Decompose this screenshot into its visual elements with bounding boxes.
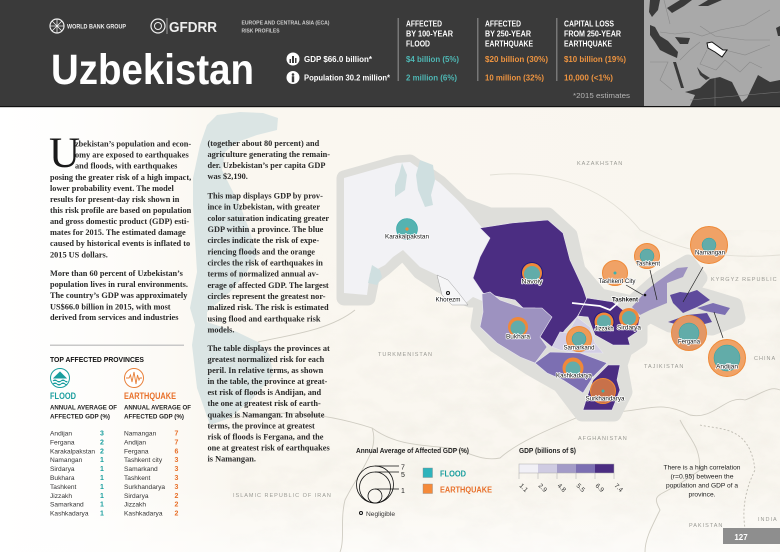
neighbouring country labels: ISLAMIC REPUBLIC OF IRAN: [233, 493, 332, 499]
stat column: flood: 2 million (6%): [406, 74, 457, 82]
neighbouring country labels: INDIA: [758, 517, 778, 523]
text block: introduction column: omy are exposed to earthquakes: [75, 150, 189, 160]
text block: introduction column: US$66.0 billion in 2015, with most: [50, 302, 171, 312]
text block: second column: in the table, the province at great-: [208, 377, 327, 386]
Kashkadarya region: [535, 352, 607, 393]
legend: affected GDP circles: 1: [401, 488, 405, 495]
stat column: earthquake affected: [477, 18, 548, 82]
legend: affected GDP circles: [356, 448, 469, 518]
province labels: Bukhara: [506, 334, 530, 340]
text block: second column: [208, 139, 330, 464]
text block: introduction column: lower probability event. The model: [50, 184, 174, 193]
text block: second column: using flood and earthquake risk: [208, 314, 321, 323]
text block: introduction column: derived from services and industries: [50, 313, 179, 322]
text block: second column: circles the risk of earthquakes in: [208, 258, 323, 268]
text block: second column: color saturation indicating greater: [208, 214, 329, 223]
province labels: Navoiy: [522, 278, 543, 286]
province labels: Khorezm: [436, 296, 460, 304]
stat column: flood: $4 billion (5%): [406, 55, 459, 64]
earthquake list: 3: [175, 484, 179, 491]
header band: [0, 0, 780, 107]
series label: EUROPE AND CENTRAL ASIA (ECA): [242, 20, 330, 26]
icon: earthquake: [124, 368, 144, 388]
flood list: 1: [100, 502, 104, 509]
province labels: Samarkand: [564, 344, 595, 352]
province labels: Surkhandarya: [586, 396, 625, 402]
icon: flood: [50, 368, 70, 388]
text block: second column: der. Uzbekistan’s per capita GDP: [208, 161, 325, 170]
flood list: FLOOD: [50, 391, 76, 401]
text block: second column: erage of affected GDP. The largest: [208, 281, 329, 290]
text block: introduction column: and gross domestic product (GDP) esti-: [50, 217, 189, 226]
text block: second column: models.: [208, 326, 234, 334]
panel: province map: [344, 160, 746, 414]
province labels: Karakalpakstan: [385, 234, 429, 240]
correlation note: population and GDP of a: [666, 482, 738, 490]
stat column: capital loss: $10 billion (19%): [564, 55, 626, 64]
earthquake list: 2: [175, 502, 179, 509]
flood list: Sirdarya: [50, 466, 75, 473]
earthquake list: 7: [175, 430, 179, 438]
text block: second column: terms, the province at greatest: [208, 421, 315, 430]
text block: second column: quakes is Namangan. In absolute: [208, 410, 325, 419]
text block: introduction column: zbekistan’s population and econ-: [75, 140, 191, 148]
flood list: AFFECTED GDP (%): [50, 414, 110, 420]
correlation note: province.: [688, 492, 716, 498]
earthquake list: 3: [175, 466, 179, 473]
text block: second column: was $2,190.: [208, 172, 248, 181]
text block: introduction column: caused by historical events is inflated to: [50, 239, 190, 248]
flood list: Jizzakh: [50, 493, 72, 500]
flood list: Kashkadarya: [50, 511, 89, 518]
page number: 127: [734, 533, 748, 542]
text block: introduction column: U: [49, 130, 80, 177]
map background: [145, 107, 780, 552]
flood list: 1: [100, 457, 104, 464]
flood list: 2: [100, 448, 104, 455]
legend: GDP scale: 5.5: [575, 482, 586, 494]
series label: RISK PROFILES: [242, 28, 280, 34]
province labels: Sirdarya: [617, 324, 641, 332]
earthquake list: ANNUAL AVERAGE OF: [124, 404, 191, 412]
legend: affected GDP circles: 5: [401, 472, 405, 479]
text block: second column: circles represent the greatest nor-: [208, 292, 326, 301]
Andijan region: [697, 303, 730, 315]
legend: GDP scale: 1.1: [518, 482, 529, 494]
text block: introduction column: population lives in rural environments.: [50, 280, 188, 289]
text block: introduction column: and floods, with earthquakes: [75, 162, 178, 170]
flood list: Bukhara: [50, 475, 75, 482]
text block: introduction column: posing the greater risk of a high impact,: [50, 173, 191, 182]
legend: affected GDP circles: Negligible: [366, 511, 395, 518]
Tashkent region: [632, 267, 688, 315]
text block: introduction column: results for present-day risk shown in: [50, 195, 180, 204]
logo: World Bank Group: WORLD BANK GROUP: [67, 24, 127, 30]
text block: introduction column: mates for 2015. The estimated damage: [50, 228, 186, 237]
flood list: Namangan: [50, 457, 83, 464]
country halo: [344, 162, 738, 414]
risk circles: [396, 218, 746, 404]
heading: TOP AFFECTED PROVINCES: [50, 355, 144, 364]
text block: second column: This map displays GDP by prov-: [208, 192, 323, 200]
legend: affected GDP circles: Annual Average of Affected GDP (%): [356, 448, 469, 455]
legend: hazard colours: FLOOD: [440, 470, 466, 478]
legend: affected GDP circles: 7: [401, 464, 405, 472]
earthquake list: AFFECTED GDP (%): [124, 414, 184, 420]
province labels: Namangan: [695, 250, 725, 256]
text block: introduction column: The country’s GDP was approximately: [50, 291, 188, 300]
province labels: Tashkent: [636, 260, 660, 268]
province labels: Tashkent City: [598, 278, 636, 285]
neighbouring country labels: TURKMENISTAN: [378, 352, 433, 358]
province labels: Kashkadarya: [556, 372, 592, 380]
flood list: ANNUAL AVERAGE OF: [50, 404, 117, 412]
flood list: 1: [100, 466, 104, 473]
stat column: flood: BY 100-YEAR: [406, 30, 453, 38]
text block: introduction column: 2015 US dollars.: [50, 250, 108, 260]
stat column: capital loss: EARTHQUAKE: [564, 40, 613, 48]
Fergana region: [668, 313, 712, 328]
text block: second column: ince in Uzbekistan, with greater: [208, 203, 320, 212]
legend: GDP scale: GDP (billions of $): [519, 448, 576, 455]
text block: second column: circles indicate the risk of expe-: [208, 236, 319, 245]
flood list: 2: [100, 439, 104, 446]
earthquake list: EARTHQUAKE: [124, 391, 176, 401]
Surkhandarya region: [583, 365, 620, 410]
legend: GDP scale: 6.9: [594, 482, 605, 494]
text block: second column: peril. In relative terms, as shown: [208, 366, 324, 375]
flood list: [50, 391, 117, 518]
neighbouring country labels: PAKISTAN: [689, 523, 723, 529]
neighbouring country borders: [230, 174, 780, 552]
text block: introduction column: this risk profile are based on population: [50, 206, 192, 215]
flood list: 1: [100, 475, 104, 482]
stat column: flood: [398, 18, 459, 82]
province labels: Tashkent: [612, 296, 639, 304]
flood list: 1: [100, 493, 104, 500]
text block: second column: est risk of floods is Andijan, and: [208, 388, 322, 397]
legend: hazard colours: [423, 468, 493, 494]
Aral Sea and lakes: [368, 160, 435, 285]
earthquake list: 2: [175, 511, 179, 518]
correlation note: [664, 464, 741, 498]
earthquake list: Kashkadarya: [124, 511, 163, 518]
Jizzakh region: [578, 298, 640, 345]
Caspian Sea: [190, 112, 278, 425]
series label: [242, 20, 330, 34]
stat column: earthquake affected: 10 million (32%): [485, 74, 544, 82]
stat column: flood: FLOOD: [406, 40, 430, 48]
text block: second column: the one at greatest risk of earth-: [208, 399, 321, 408]
text block: second column: riencing floods and the orange: [208, 247, 315, 256]
logo: GFDRR: [151, 18, 217, 36]
text block: introduction column: More than 60 percent of Uzbekistan’s: [50, 269, 184, 278]
text block: introduction column: [49, 130, 192, 322]
legend: GDP scale: 7.4: [613, 482, 624, 494]
earthquake list: Tashkent city: [124, 457, 163, 464]
leader lines: [626, 267, 723, 338]
text block: second column: one at greatest risk of earthquakes: [208, 444, 330, 452]
neighbouring country labels: AFGHANISTAN: [578, 436, 628, 442]
stat column: capital loss: [556, 18, 626, 82]
earthquake list: Andijan: [124, 439, 146, 446]
Karakalpakstan region: [344, 162, 490, 306]
title: Uzbekistan: [51, 46, 254, 94]
estimates note: *2015 estimates: [573, 91, 630, 100]
neighbouring country labels: TAJIKISTAN: [644, 364, 684, 370]
stat column: capital loss: CAPITAL LOSS: [564, 20, 615, 28]
Aydar lake: [572, 303, 618, 310]
earthquake list: Namangan: [124, 430, 157, 438]
Bukhara region: [480, 292, 552, 363]
Khorezm region: [437, 275, 468, 305]
earthquake list: Fergana: [124, 448, 149, 455]
earthquake list: 3: [175, 457, 179, 464]
text block: second column: GDP within a province. The blue: [208, 225, 324, 234]
Namangan region: [670, 290, 710, 313]
locator globe: [644, 0, 780, 106]
earthquake list: Surkhandarya: [124, 484, 165, 491]
neighbouring country labels: KAZAKHSTAN: [577, 161, 623, 167]
text block: second column: The table displays the provinces at: [208, 344, 330, 353]
stat column: earthquake affected: $20 billion (30%): [485, 55, 548, 64]
flood list: Karakalpakstan: [50, 448, 95, 455]
stat column: earthquake affected: AFFECTED: [485, 20, 521, 28]
page number: [723, 528, 780, 544]
text block: second column: agriculture generating the remain-: [208, 150, 330, 159]
earthquake list: Sirdarya: [124, 493, 149, 500]
legend: GDP scale: [518, 448, 624, 494]
GDP stat: [286, 52, 373, 66]
earthquake list: 6: [175, 448, 179, 455]
logo: GFDRR: GFDRR: [169, 20, 217, 36]
flood list: 1: [100, 484, 104, 491]
population stat: [286, 71, 391, 84]
earthquake list: Tashkent: [124, 475, 151, 482]
legend: GDP scale: 2.9: [537, 482, 548, 494]
stat column: capital loss: 10,000 (<1%): [564, 74, 613, 82]
legend: hazard colours: EARTHQUAKE: [440, 486, 493, 494]
text block: second column: terms of normalized annual av-: [208, 270, 319, 279]
stat column: earthquake affected: EARTHQUAKE: [485, 40, 534, 48]
province labels: [385, 234, 738, 402]
earthquake list: 3: [175, 475, 179, 482]
panel: top affected provinces: [50, 344, 191, 518]
province labels: Andijan: [716, 364, 738, 370]
flood list: Fergana: [50, 439, 75, 446]
GDP stat: GDP $66.0 billion*: [304, 55, 373, 64]
population stat: Population 30.2 million*: [304, 74, 391, 82]
neighbouring country labels: [233, 161, 778, 529]
neighbouring country labels: CHINA: [754, 356, 776, 362]
logo: World Bank Group: [50, 19, 127, 33]
correlation note: (r=0.95) between the: [670, 474, 734, 480]
text block: second column: malized risk. The risk is estimated: [208, 303, 329, 312]
flood list: Tashkent: [50, 484, 77, 491]
stat column: earthquake affected: BY 250-YEAR: [485, 30, 531, 38]
legend: GDP scale: 4.8: [556, 482, 567, 494]
neighbouring country labels: KYRGYZ REPUBLIC: [711, 277, 778, 283]
text block: second column: is Namangan.: [208, 454, 256, 464]
text block: second column: risk of floods is Fergana, and the: [208, 432, 324, 441]
Navoiy region: [473, 220, 587, 347]
stat column: flood: AFFECTED: [406, 20, 442, 28]
earthquake list: 2: [175, 493, 179, 500]
correlation note: There is a high correlation: [664, 464, 741, 472]
text block: second column: greatest normalized risk for each: [208, 355, 325, 364]
flood list: Samarkand: [50, 502, 84, 509]
earthquake list: Samarkand: [124, 466, 158, 473]
flood list: Andijan: [50, 430, 72, 438]
earthquake list: 7: [175, 439, 179, 446]
flood list: 1: [100, 511, 104, 518]
text block: second column: (together about 80 percent) and: [208, 139, 320, 148]
flood list: 3: [100, 430, 104, 438]
earthquake list: Jizzakh: [124, 502, 146, 509]
province labels: Jizzakh: [594, 326, 614, 332]
stat column: capital loss: FROM 250-YEAR: [564, 30, 621, 38]
province labels: Fergana: [678, 338, 700, 346]
earthquake list: [124, 391, 191, 518]
Samarkand region: [552, 317, 603, 353]
